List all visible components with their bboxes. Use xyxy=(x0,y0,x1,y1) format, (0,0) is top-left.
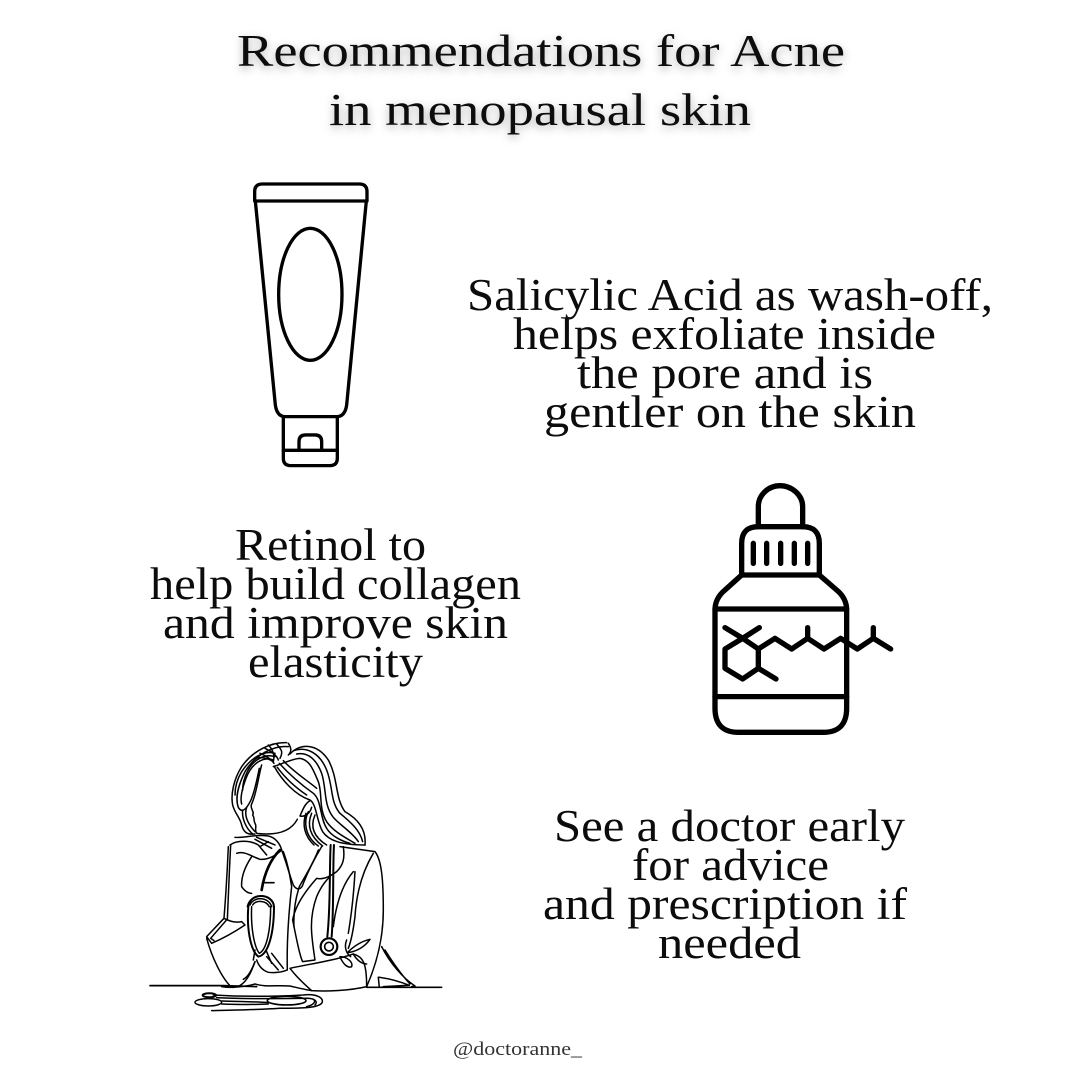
title xyxy=(237,25,845,135)
text: salicylic acid: the pore and is xyxy=(577,348,873,398)
stethoscope on table xyxy=(195,993,322,1011)
text: see a doctor: needed xyxy=(658,918,801,968)
text: see a doctor: See a doctor early xyxy=(554,801,906,851)
face and ear xyxy=(251,765,312,834)
icon: dropper bottle with molecule xyxy=(715,486,891,732)
table line xyxy=(150,986,442,987)
text: salicylic acid: Salicylic Acid as wash-off, xyxy=(467,270,993,320)
text: retinol: help build collagen xyxy=(150,559,521,609)
stethoscope on neck xyxy=(247,845,337,963)
text: retinol xyxy=(150,520,521,687)
text: salicylic acid: gentler on the skin xyxy=(544,387,916,437)
text: retinol: and improve skin xyxy=(163,598,508,648)
footer handle: @doctoranne_ xyxy=(453,1039,583,1060)
illustration: doctor line drawing xyxy=(150,743,442,1011)
text: salicylic acid xyxy=(467,270,993,437)
text: see a doctor: for advice xyxy=(632,840,829,890)
text: salicylic acid: helps exfoliate inside xyxy=(513,309,936,359)
hair xyxy=(232,743,365,846)
icon: cream tube xyxy=(255,184,367,466)
coat and collar xyxy=(222,847,415,991)
text: retinol: elasticity xyxy=(248,637,424,687)
text: see a doctor xyxy=(543,801,907,968)
title: Recommendations for Acne xyxy=(237,25,845,76)
text: retinol: Retinol to xyxy=(235,520,426,570)
title: in menopausal skin xyxy=(329,84,751,135)
hand on chin xyxy=(207,835,282,987)
text: see a doctor: and prescription if xyxy=(543,879,907,929)
